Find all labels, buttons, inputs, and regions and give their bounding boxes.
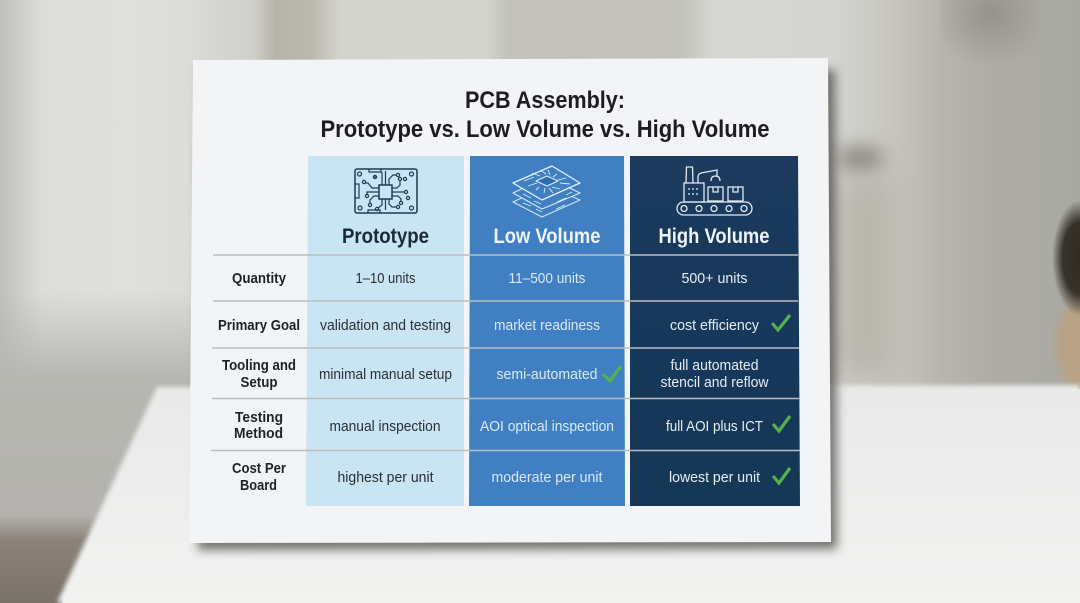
icon: check	[773, 468, 790, 483]
row: Cost Per Board: Cost Per	[232, 460, 286, 477]
row: Quantity: 1–10 units	[356, 270, 416, 287]
panel: comparison card	[189, 58, 831, 543]
row: Testing Method: Method	[234, 425, 283, 442]
row: Tooling and Setup: full automated	[670, 357, 758, 374]
title	[320, 87, 770, 143]
row: Primary Goal	[218, 315, 790, 334]
row: Primary Goal: Primary Goal	[218, 317, 300, 334]
dark object at right edge	[1024, 200, 1080, 316]
row: Tooling and Setup: Setup	[240, 374, 278, 391]
row: Cost Per Board: Board	[240, 477, 277, 494]
row: Primary Goal: validation and testing	[320, 317, 451, 334]
row: Testing Method: AOI optical inspection	[480, 418, 614, 435]
row: Quantity	[232, 270, 748, 287]
row: Quantity: 11–500 units	[508, 270, 586, 287]
column headings: Low Volume	[494, 225, 600, 248]
icon: circuit board with chip	[355, 169, 417, 213]
row dividers	[211, 255, 800, 450]
column headings: Prototype	[342, 225, 429, 248]
row: Cost Per Board: lowest per unit	[669, 469, 761, 486]
row: Quantity: 500+ units	[682, 270, 748, 287]
title: PCB Assembly:	[465, 87, 625, 114]
column headings: High Volume	[658, 225, 770, 248]
column: Low Volume	[469, 156, 625, 506]
row: Tooling and Setup: Tooling and	[222, 357, 296, 374]
icon: check	[603, 366, 621, 381]
icon: check	[773, 416, 790, 431]
title: Prototype vs. Low Volume vs. High Volume	[320, 116, 770, 143]
row: Testing Method: full AOI plus ICT	[666, 418, 763, 435]
white table surface	[57, 385, 1080, 603]
row: Tooling and Setup	[222, 357, 769, 391]
row: Tooling and Setup: stencil and reflow	[660, 374, 769, 391]
row: Testing Method: manual inspection	[330, 418, 440, 435]
icon: check	[772, 315, 790, 330]
row: Testing Method: Testing	[235, 409, 283, 426]
row: Testing Method	[234, 409, 790, 442]
row: Tooling and Setup: semi-automated	[496, 366, 598, 383]
row: Cost Per Board	[232, 460, 790, 494]
row: Tooling and Setup: minimal manual setup	[319, 366, 452, 383]
row: Cost Per Board: highest per unit	[338, 469, 434, 486]
icon: factory and conveyor	[677, 167, 752, 215]
row: Primary Goal: market readiness	[494, 317, 600, 334]
row: Cost Per Board: moderate per unit	[492, 469, 603, 486]
column: High Volume	[630, 156, 800, 506]
icon: stacked circuit boards	[513, 166, 580, 217]
row: Quantity: Quantity	[232, 270, 287, 287]
column headings	[342, 225, 770, 248]
column: Prototype	[306, 156, 464, 506]
card shadow	[198, 70, 837, 550]
row: Primary Goal: cost efficiency	[670, 317, 759, 334]
